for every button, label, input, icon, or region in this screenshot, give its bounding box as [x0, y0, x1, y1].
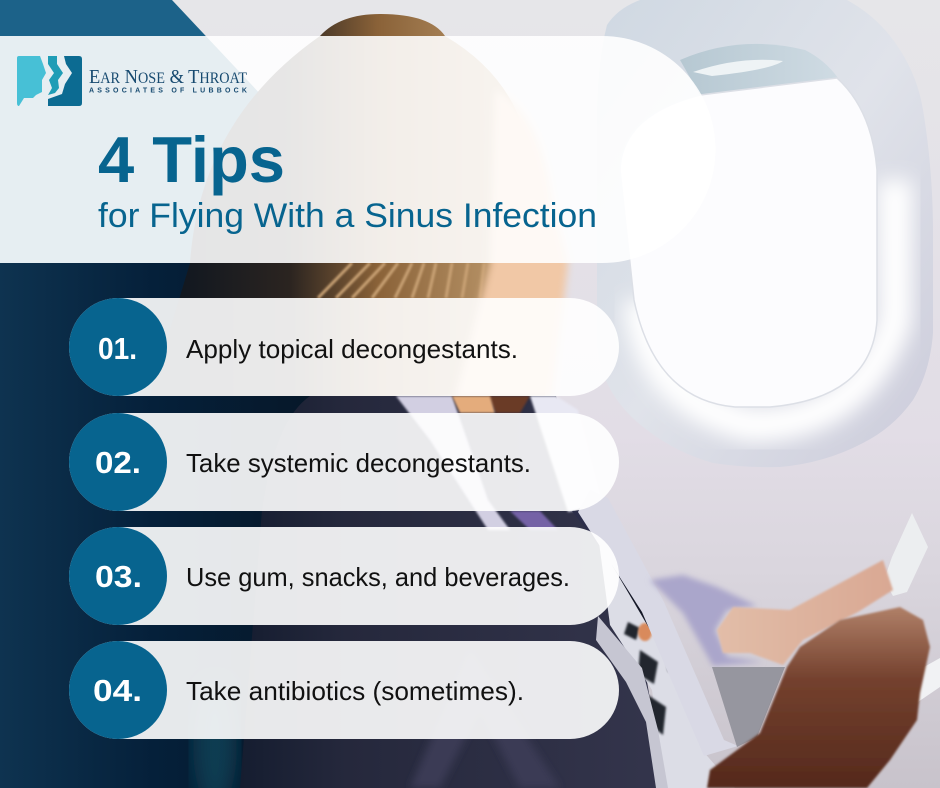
tip 2 pill — [69, 413, 619, 511]
face and neck — [455, 90, 568, 398]
tip 3 number: 03. — [95, 559, 142, 594]
tip 1 pill — [69, 298, 619, 396]
tip 2 — [69, 413, 619, 511]
right zipper band — [578, 490, 738, 756]
logo icon: face profiles — [17, 56, 82, 106]
seat back upper — [0, 0, 280, 263]
hood white strip — [530, 396, 603, 512]
zipper dark interior — [602, 512, 702, 745]
hoodie fold highlights — [410, 650, 560, 788]
tip 2 number badge — [69, 413, 167, 511]
tip 3 text: Use gum, snacks, and beverages. — [186, 562, 570, 592]
tip 4 — [69, 641, 619, 739]
hair streaks — [318, 263, 484, 298]
sleeve — [650, 575, 763, 666]
purple shirt patch — [510, 511, 558, 530]
tip 3 — [69, 527, 619, 625]
tip 1 number badge — [69, 298, 167, 396]
tip 4 number: 04. — [93, 673, 142, 708]
header panel — [0, 36, 716, 263]
near hand — [707, 607, 930, 788]
armrest — [712, 667, 785, 747]
tip 1 number: 01. — [98, 331, 137, 366]
orange shirt mark — [638, 623, 652, 641]
logo tagline: ASSOCIATES OF LUBBOCK — [89, 88, 247, 94]
tip 3 pill — [69, 527, 619, 625]
far hand — [717, 560, 893, 665]
tip 1 — [69, 298, 619, 396]
phone lower edge — [915, 658, 940, 704]
shirt print — [598, 535, 735, 788]
subtitle: for Flying With a Sinus Infection — [98, 197, 597, 235]
orange skin patch — [452, 396, 495, 413]
tip 2 number: 02. — [95, 445, 141, 480]
neck hair patch — [488, 396, 530, 413]
hoodie body — [240, 396, 665, 788]
shirt pattern marks — [624, 622, 678, 735]
tip 2 text: Take systemic decongestants. — [186, 448, 531, 478]
hair — [150, 14, 545, 396]
title: 4 Tips — [98, 123, 285, 196]
tip 1 text: Apply topical decongestants. — [186, 334, 518, 364]
tip 4 pill — [69, 641, 619, 739]
tip 4 text: Take antibiotics (sometimes). — [186, 676, 524, 706]
airplane window — [597, 0, 933, 467]
seat back lower — [0, 263, 340, 788]
logo — [17, 56, 247, 106]
dark inner hood — [572, 500, 645, 575]
tip 4 number badge — [69, 641, 167, 739]
logo wordmark: EAR NOSE & THROAT — [89, 66, 247, 88]
hoodie collar — [396, 396, 510, 530]
phone — [884, 513, 928, 596]
seat lower teal patch — [193, 680, 237, 788]
left zipper band — [596, 616, 668, 788]
tip 3 number badge — [69, 527, 167, 625]
